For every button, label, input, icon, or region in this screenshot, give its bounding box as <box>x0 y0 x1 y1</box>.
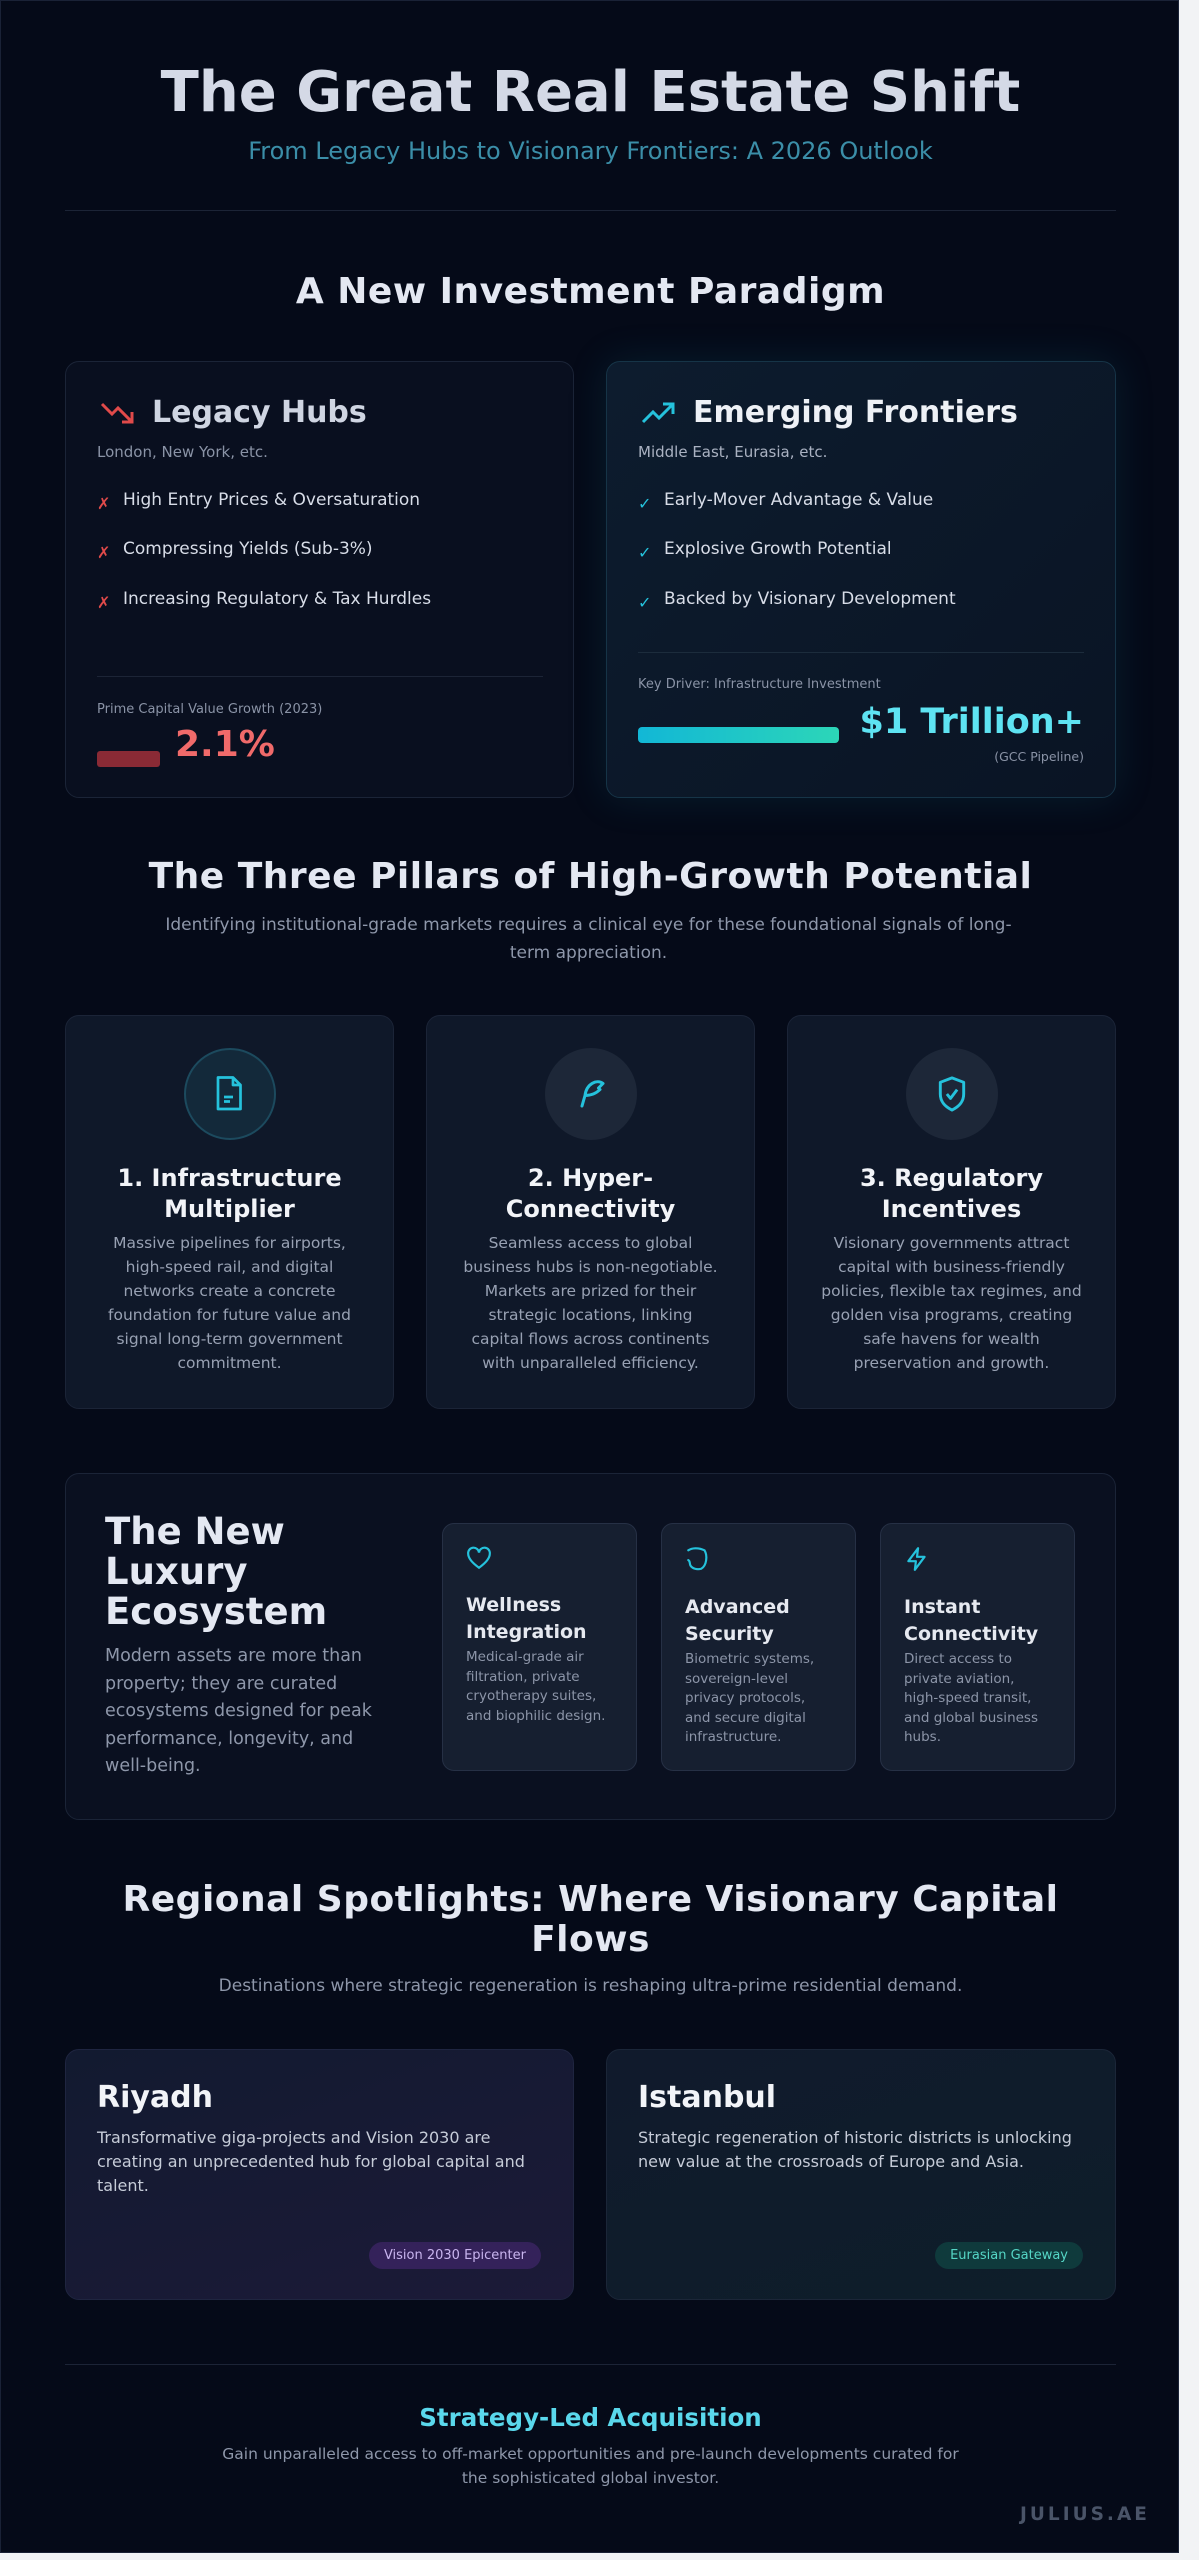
panel: emerging frontiers: Early-Mover Advantage & Value <box>664 490 933 510</box>
panel: legacy hubs <box>65 361 574 798</box>
panel: legacy hubs: Increasing Regulatory & Tax Hurdles <box>123 589 431 609</box>
card: connectivity <box>880 1523 1075 1771</box>
card: connectivity: Direct access to private aviation, high-speed transit, and global business hubs. <box>904 1651 1038 1745</box>
card: security <box>661 1523 856 1771</box>
panel: legacy hubs: London, New York, etc. <box>97 443 268 461</box>
panel: pillar 1: 1. Infrastructure Multiplier <box>117 1164 342 1223</box>
stat: $1 trillion: (GCC Pipeline) <box>994 749 1084 764</box>
panel: emerging frontiers <box>606 361 1116 798</box>
panel: legacy hubs: Prime Capital Value Growth (2023) <box>97 702 322 717</box>
card: wellness: Medical-grade air filtration, private cryotherapy suites, and biophilic design. <box>466 1649 605 1724</box>
panel: pillar 2: capital flows across continents with unparalleled efficiency. <box>471 1330 710 1372</box>
tag: eurasian gateway <box>935 2242 1083 2269</box>
icon: trending up <box>642 402 674 423</box>
stat: $1 trillion <box>638 702 1084 764</box>
text: pillars intro: Identifying institutional-grade markets requires a clinical eye for these foundational signals of long-term appreciation. <box>165 915 1012 963</box>
panel: luxury ecosystem <box>65 1473 1116 1820</box>
tag: eurasian gateway: Eurasian Gateway <box>950 2248 1068 2263</box>
panel: riyadh <box>65 2049 574 2300</box>
brand: julius.ae: JULIUS.AE <box>1020 2504 1150 2525</box>
list: legacy drawbacks <box>97 490 431 612</box>
card: wellness: Wellness Integration <box>466 1594 587 1643</box>
heading: new investment paradigm: A New Investment Paradigm <box>296 271 885 312</box>
stat: 2.1% <box>97 724 275 767</box>
panel: pillar 3 <box>787 1015 1116 1409</box>
panel: legacy hubs: ✗ <box>97 543 110 562</box>
panel: legacy hubs: ✗ <box>97 593 110 612</box>
panel: pillar 2: Seamless access to global business hubs is non-negotiable. Markets are prized for their strategic locations, linking <box>463 1234 718 1324</box>
panel: emerging frontiers: ✓ <box>638 494 651 513</box>
icon: shield check <box>906 1048 998 1140</box>
card: security: Biometric systems, sovereign-level privacy protocols, and secure digital infrastructure. <box>685 1651 814 1745</box>
heading: three pillars: The Three Pillars of High-Growth Potential <box>149 856 1032 897</box>
list: frontier advantages <box>638 490 956 612</box>
title: The Great Real Estate Shift <box>161 60 1020 125</box>
subtitle: From Legacy Hubs to Visionary Frontiers: A 2026 Outlook <box>248 137 933 165</box>
heading: regional spotlights: Regional Spotlights: Where Visionary Capital Flows <box>123 1879 1058 1960</box>
heading: new luxury ecosystem: The New Luxury Ecosystem <box>105 1510 327 1633</box>
tag: vision 2030: Vision 2030 Epicenter <box>384 2248 526 2263</box>
stat: $1 trillion: $1 Trillion+ <box>860 702 1084 742</box>
panel: pillar 1: Massive pipelines for airports, high-speed rail, and digital networks create a concrete foundation for future value and signal long-term government commitment. <box>108 1234 351 1372</box>
text: luxury intro: Modern assets are more than property; they are curated ecosystems designed for peak performance, longevity, and well-being. <box>105 1646 372 1776</box>
panel: emerging frontiers: Backed by Visionary Development <box>664 589 956 609</box>
card: wellness <box>442 1523 637 1771</box>
panel: emerging frontiers: ✓ <box>638 593 651 612</box>
panel: legacy hubs: Compressing Yields (Sub-3%) <box>123 539 373 559</box>
card: connectivity: Instant Connectivity <box>904 1596 1038 1645</box>
text: regional intro: Destinations where strategic regeneration is reshaping ultra-prime residential demand. <box>219 1976 962 1996</box>
panel: istanbul <box>606 2049 1116 2300</box>
panel: legacy hubs: ✗ <box>97 494 110 513</box>
text: footer: Gain unparalleled access to off-market opportunities and pre-launch developments curated for the sophisticated global investor. <box>222 2445 959 2487</box>
icon: trending down <box>101 403 134 424</box>
panel: pillar 2 <box>426 1015 755 1409</box>
panel: emerging frontiers: Key Driver: Infrastructure Investment <box>638 677 881 692</box>
heading: legacy hubs: Legacy Hubs <box>152 395 367 430</box>
panel: emerging frontiers: ✓ <box>638 543 651 562</box>
panel: emerging frontiers: Explosive Growth Potential <box>664 539 892 559</box>
panel: pillar 3: 3. Regulatory Incentives <box>860 1164 1043 1223</box>
icon: feather <box>544 1048 636 1140</box>
heading: emerging frontiers: Emerging Frontiers <box>693 395 1018 430</box>
stat: 2.1%: 2.1% <box>175 724 275 765</box>
tag: vision 2030 <box>369 2242 541 2269</box>
panel: istanbul: Istanbul <box>638 2080 776 2115</box>
panel: pillar 1 <box>65 1015 394 1409</box>
icon: document <box>184 1048 276 1140</box>
panel: istanbul: Strategic regeneration of historic districts is unlocking new value at the crossroads of Europe and Asia. <box>638 2128 1072 2171</box>
panel: pillar 2: 2. Hyper-Connectivity <box>506 1164 675 1223</box>
panel: pillar 3: Visionary governments attract capital with business-friendly policies, flexible tax regimes, and golden visa programs, creating safe havens for wealth preservation and growth. <box>821 1234 1082 1372</box>
panel: legacy hubs: High Entry Prices & Oversaturation <box>123 490 420 510</box>
card: security: Advanced Security <box>685 1596 790 1645</box>
heading: strategy-led acquisition: Strategy-Led Acquisition <box>419 2403 762 2432</box>
panel: riyadh: Riyadh <box>97 2080 213 2115</box>
panel: riyadh: Transformative giga-projects and Vision 2030 are creating an unprecedented hub for global capital and talent. <box>97 2128 525 2195</box>
panel: emerging frontiers: Middle East, Eurasia, etc. <box>638 443 827 461</box>
